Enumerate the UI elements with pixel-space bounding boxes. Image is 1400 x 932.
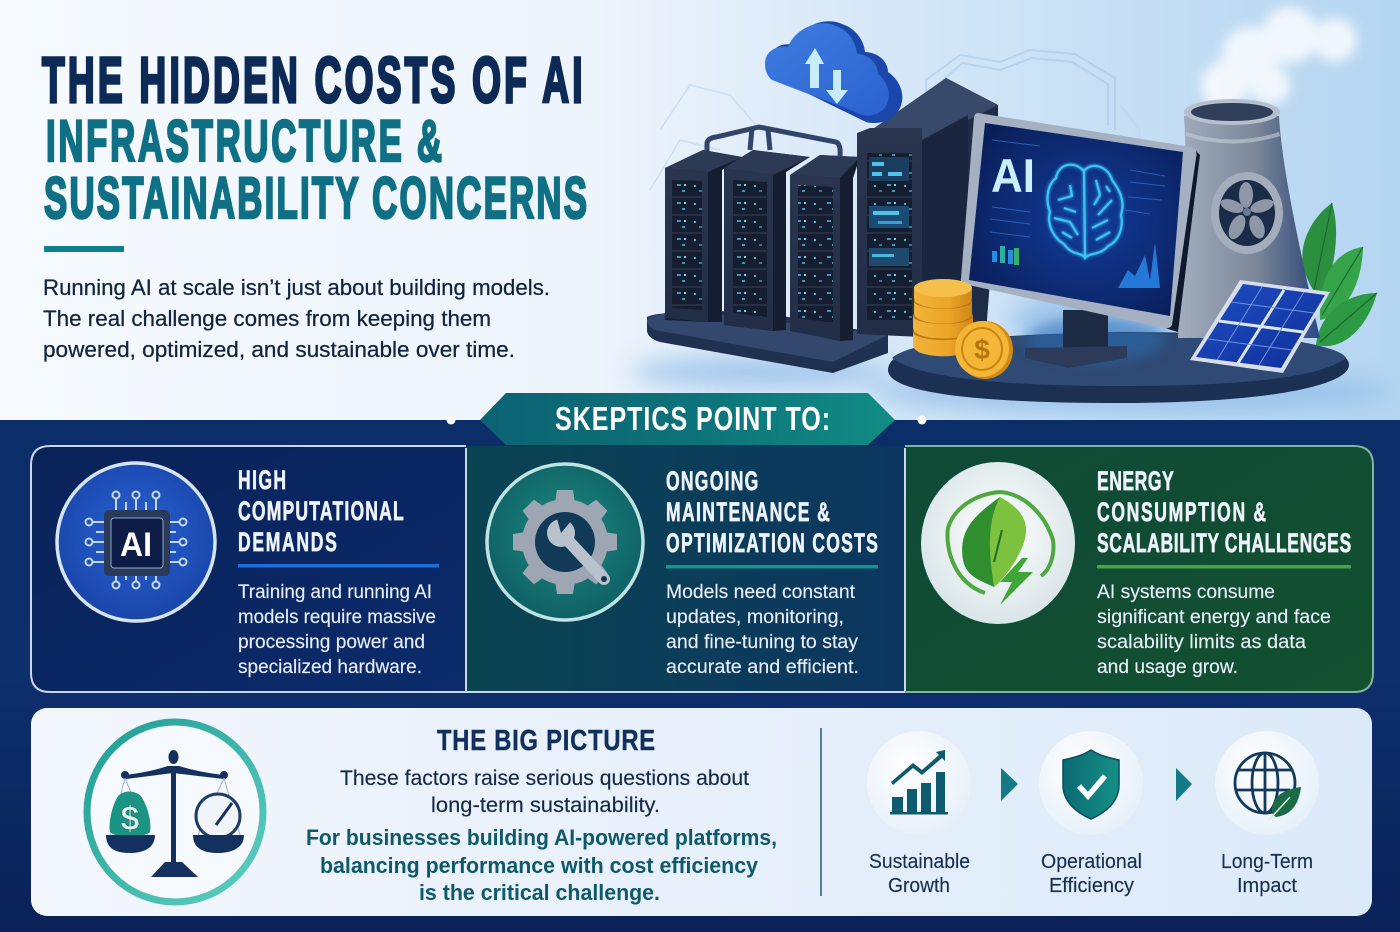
title: INFRASTRUCTURE & (46, 110, 442, 174)
brain (1048, 165, 1123, 258)
body text: and usage grow. (1097, 656, 1238, 678)
heading: HIGH (238, 464, 286, 495)
decorative dots (446, 416, 926, 424)
body text: accurate and efficient. (666, 656, 859, 678)
ribbon heading: skeptics point to (480, 393, 895, 445)
icon labels: Impact (1237, 875, 1297, 897)
body text (238, 581, 436, 678)
heading (1097, 465, 1351, 558)
icon labels: Operational (1041, 851, 1142, 873)
icon: growth chart (867, 731, 971, 835)
background: navy band (0, 420, 1400, 932)
body text: and fine-tuning to stay (666, 631, 858, 653)
heading: THE BIG PICTURE (437, 724, 655, 757)
solar panel (1190, 280, 1330, 373)
body text (1097, 581, 1331, 678)
circuit lines (926, 50, 1115, 150)
left platform (647, 311, 888, 373)
title: SUSTAINABILITY CONCERNS (44, 167, 587, 231)
body text: Models need constant (666, 581, 856, 603)
server rack 4 (857, 78, 998, 345)
heading (238, 464, 404, 557)
panel: ongoing maintenance (466, 446, 905, 692)
text block: These factors raise serious questions about (340, 766, 749, 790)
coins: $ (974, 334, 990, 365)
arrow (1176, 768, 1192, 801)
intro text (43, 275, 550, 362)
monitor (961, 113, 1200, 368)
panel: energy consumption (905, 446, 1373, 692)
intro text: Running AI at scale isn’t just about building models. (43, 275, 550, 300)
body text: significant energy and face (1097, 606, 1331, 628)
server rack 3 (790, 155, 860, 341)
icon labels: Efficiency (1049, 875, 1134, 897)
icon: globe and leaf (1215, 731, 1319, 835)
server rack 2 (724, 150, 810, 331)
body text: specialized hardware. (238, 656, 422, 678)
body text: updates, monitoring, (666, 606, 844, 628)
icon: AI chip: AI (120, 526, 152, 564)
steam (1201, 7, 1357, 114)
blue haze under platforms (630, 290, 1390, 414)
panel: the big picture (31, 708, 1372, 916)
title accent rule (44, 246, 124, 252)
illustration: AI data center (630, 7, 1390, 414)
icon labels: Long-Term (1221, 851, 1313, 873)
server rack 1 (665, 150, 742, 322)
heading: ONGOING (666, 465, 758, 496)
body text: Training and running AI (238, 581, 432, 603)
panel: high computational demands (31, 446, 466, 692)
text block (340, 766, 749, 817)
cloud (765, 21, 902, 123)
cooling tower (1178, 99, 1320, 338)
coins (913, 279, 1013, 379)
intro text: The real challenge comes from keeping them (43, 306, 491, 331)
title (42, 46, 587, 231)
icon: leaf and lightning (921, 462, 1075, 624)
callout text: For businesses building AI-powered platforms, (306, 825, 777, 850)
body text: models require massive (238, 606, 436, 628)
leaves (1302, 203, 1377, 346)
icon: AI chip (57, 463, 215, 621)
icon: balance scale (87, 722, 263, 902)
body text (666, 581, 859, 678)
icon: shield check (1039, 731, 1143, 835)
heading: COMPUTATIONAL (238, 495, 404, 526)
callout text: is the critical challenge. (419, 880, 660, 905)
body text: processing power and (238, 631, 425, 653)
heading: CONSUMPTION & (1097, 496, 1266, 527)
heading (666, 465, 878, 558)
icon labels: Sustainable (869, 851, 970, 873)
background: light sky header (0, 0, 1400, 425)
callout text (306, 825, 777, 905)
chart bars (992, 242, 1160, 288)
heading: DEMANDS (238, 526, 337, 557)
title: THE HIDDEN COSTS OF AI (42, 46, 583, 117)
body text: AI systems consume (1097, 581, 1275, 603)
ribbon heading: skeptics point to: SKEPTICS POINT TO: (555, 401, 830, 438)
round platform (888, 332, 1349, 403)
icon: gear and wrench (487, 464, 643, 620)
arrow (1001, 768, 1018, 801)
heading: OPTIMIZATION COSTS (666, 527, 878, 558)
callout text: balancing performance with cost efficiency (320, 853, 759, 878)
monitor: AI (991, 149, 1035, 202)
card outlines (31, 446, 1373, 692)
icon labels (869, 851, 1313, 897)
heading: MAINTENANCE & (666, 496, 830, 527)
body text: scalability limits as data (1097, 631, 1306, 653)
rack handle (707, 127, 840, 156)
icon labels: Growth (888, 875, 950, 897)
heading: SCALABILITY CHALLENGES (1097, 527, 1351, 558)
intro text: powered, optimized, and sustainable over time. (43, 337, 515, 362)
text block: long-term sustainability. (431, 793, 660, 817)
heading: ENERGY (1097, 465, 1174, 496)
icon: balance scale: $ (121, 800, 140, 838)
